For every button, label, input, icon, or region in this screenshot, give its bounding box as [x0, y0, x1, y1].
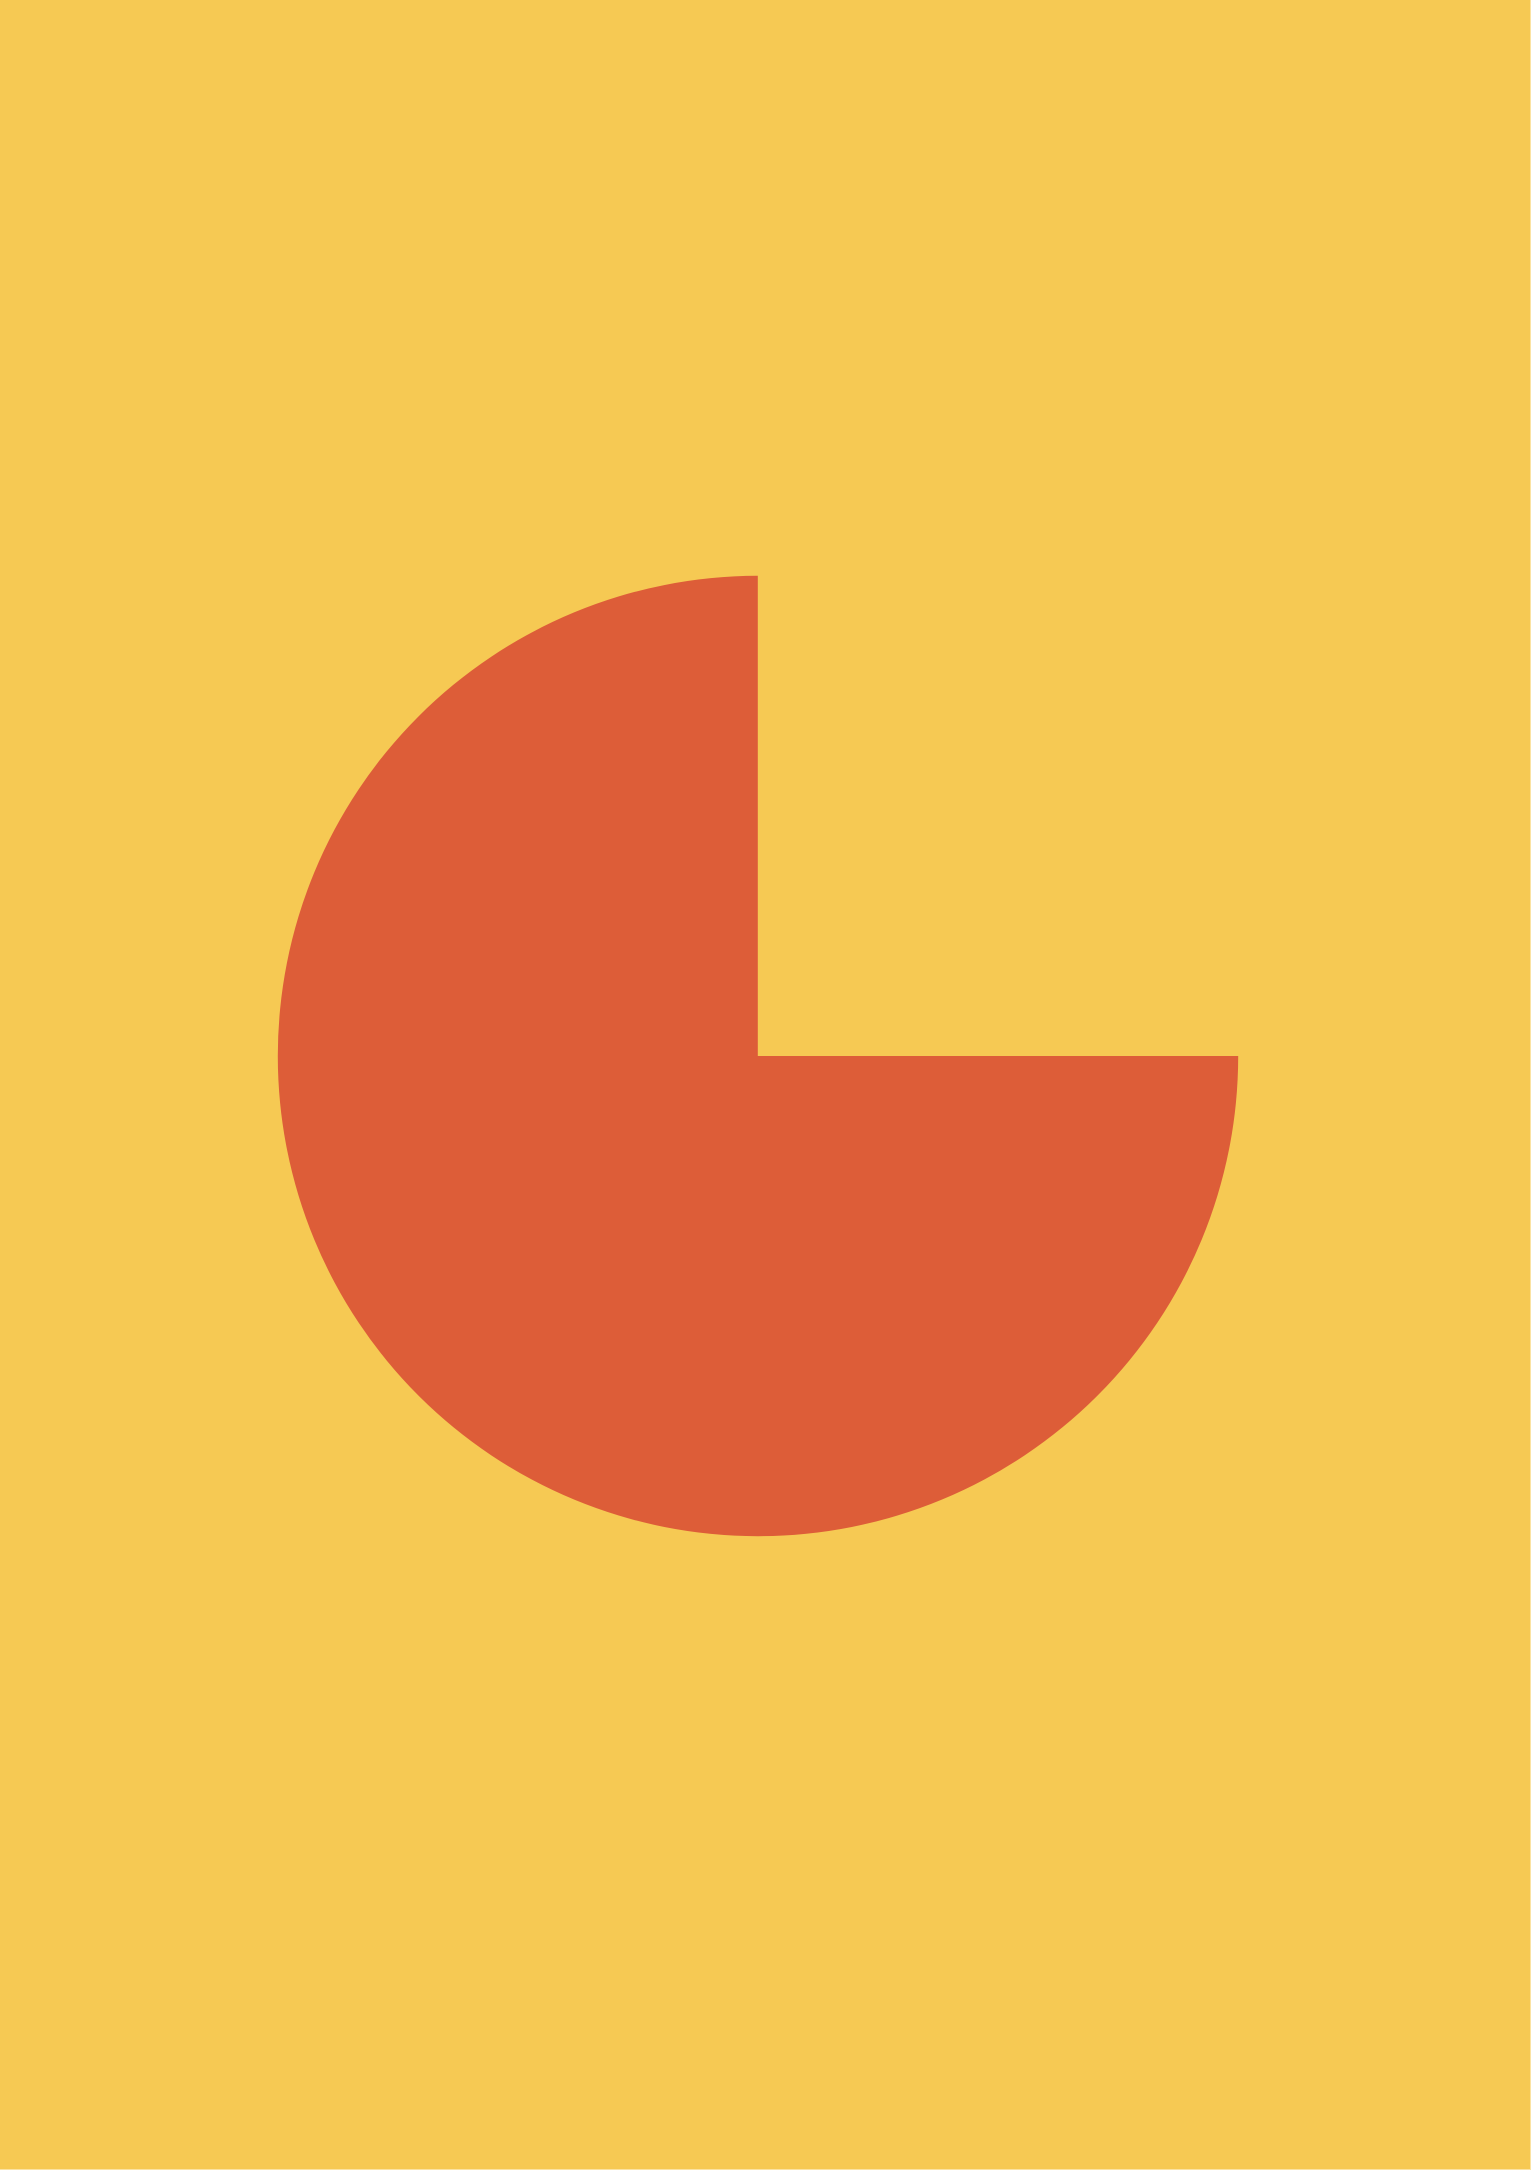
chart: three-quarter pie shape: [278, 576, 1238, 1536]
